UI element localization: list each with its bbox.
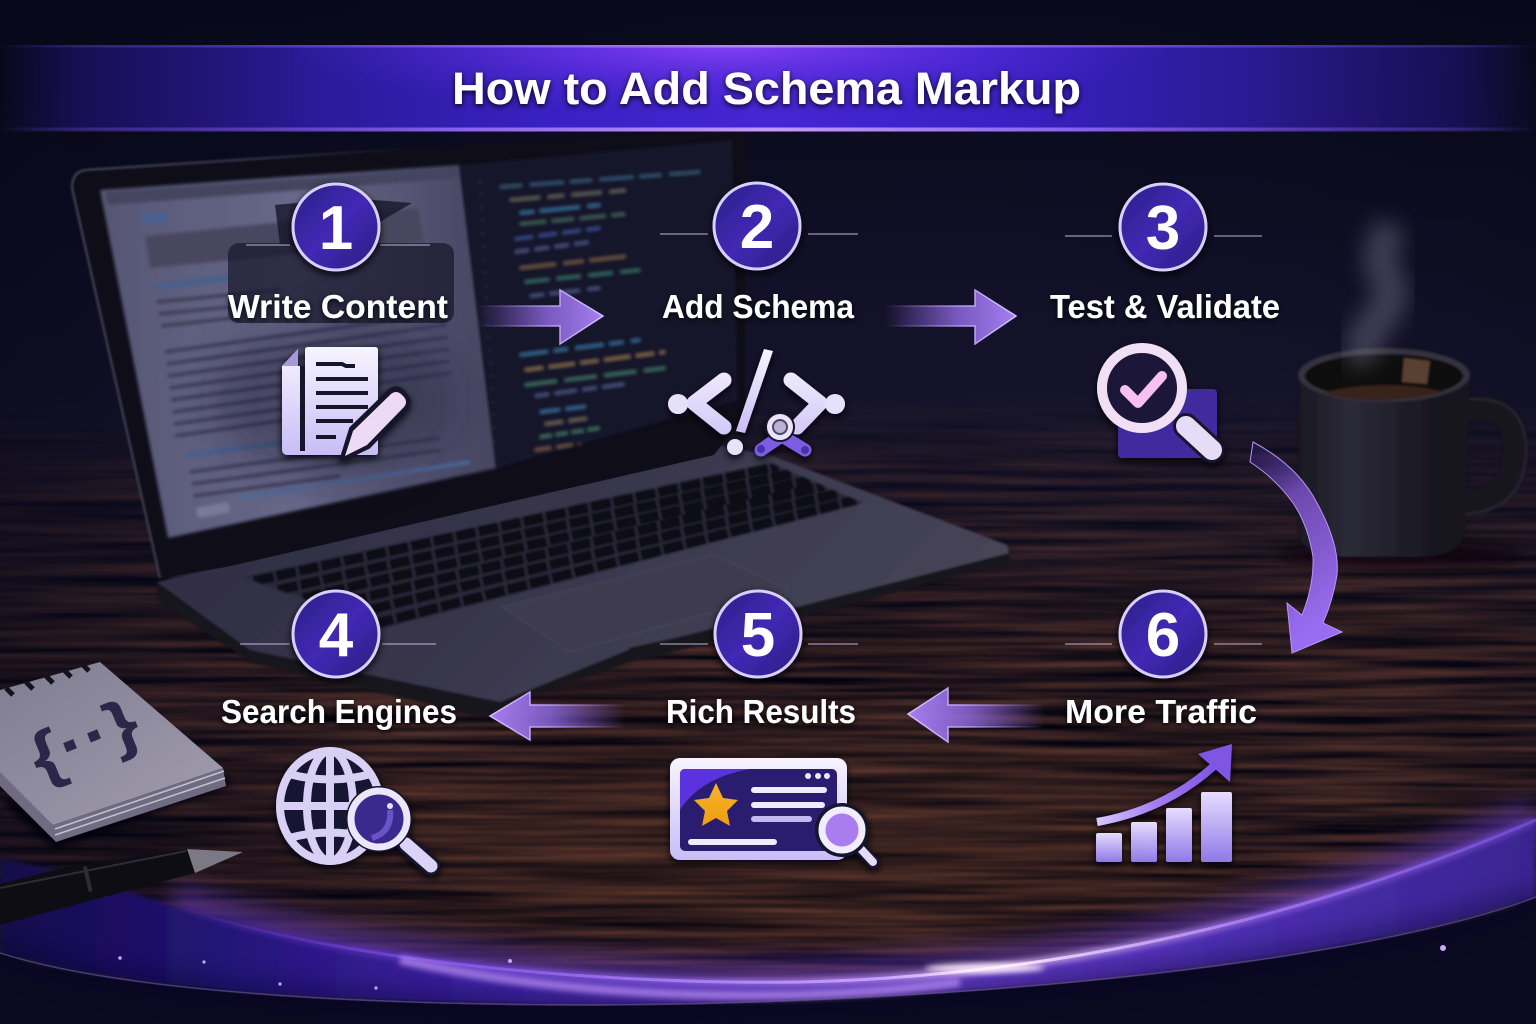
notepad spiral [6,664,89,695]
label: Rich Results [666,693,856,730]
lower swoosh [400,960,960,995]
bright arc [170,820,1536,982]
arrow: step 6 to step 5 [908,688,1045,742]
arrow: step 2 to step 3 [885,290,1016,344]
notepad edge [0,765,226,842]
laptop [72,128,1010,718]
badge 3: 3 [1146,194,1180,263]
darker inner edge [0,897,1536,1005]
mug shadow [1280,541,1520,569]
mug body [1298,375,1470,557]
label: Add Schema [662,288,855,325]
ribbon between arcs [0,820,1536,1005]
badge 2 [660,183,858,269]
badge 1: 1 [319,194,353,263]
badge 5 [660,591,858,677]
icon: rising bars and trend arrow [1096,744,1232,862]
label: Write Content [228,288,448,325]
mug handle [1455,408,1515,505]
notepad page [0,662,223,825]
icon: code brackets with gear [668,349,845,455]
haze above arc [170,820,1536,982]
lower rim line [0,897,1536,1005]
badge 2: 2 [740,193,774,262]
screen: document editor [100,165,497,538]
badge 4 [240,591,436,677]
arrow: step 5 to step 4 [490,692,625,740]
badge 6: 6 [1146,601,1180,670]
notepad shadow [0,775,230,850]
step 6: More Traffic [1065,591,1262,862]
badge 1 [246,184,430,270]
badge 4: 4 [319,601,354,670]
keyboard [243,463,863,628]
step 4: Search Engines [221,591,457,866]
notepad with curly braces [0,662,230,850]
badge 6 [1065,591,1262,677]
coffee mug [1280,225,1526,569]
title: How to Add Schema Markup [452,63,1081,114]
icon: document and pencil [282,347,408,458]
arrow: step 1 to step 2 [478,290,603,344]
screen: code editor [460,140,738,468]
label: More Traffic [1065,693,1257,730]
step 1: Write Content [228,184,448,458]
icon: rich result card and magnifier [670,758,873,862]
steam [1364,225,1392,362]
laptop deck [157,445,1010,718]
arrow: step 3 curving down to step 6 [1250,442,1342,653]
icon: globe and magnifier [280,751,431,866]
sparkles [118,945,1446,990]
title banner [0,45,1536,132]
badge 5: 5 [741,601,775,670]
label: Search Engines [221,693,457,730]
label: Test & Validate [1050,288,1280,325]
dark card behind step 1 [215,198,455,480]
highlight [925,963,1045,973]
badge 3 [1065,184,1262,270]
curly braces: {··} [18,684,149,794]
dark floor under the arc [0,897,1536,1024]
pen [0,849,243,925]
step 2: Add Schema [660,183,858,455]
mug rim and coffee [1298,348,1470,402]
trackpad [502,555,789,652]
step 3: Test & Validate [1050,184,1280,458]
bottom glow sweep [0,820,1536,1024]
icon: magnifier with check [1102,348,1217,458]
step 5: Rich Results [660,591,873,862]
laptop screen bezel [72,128,745,578]
